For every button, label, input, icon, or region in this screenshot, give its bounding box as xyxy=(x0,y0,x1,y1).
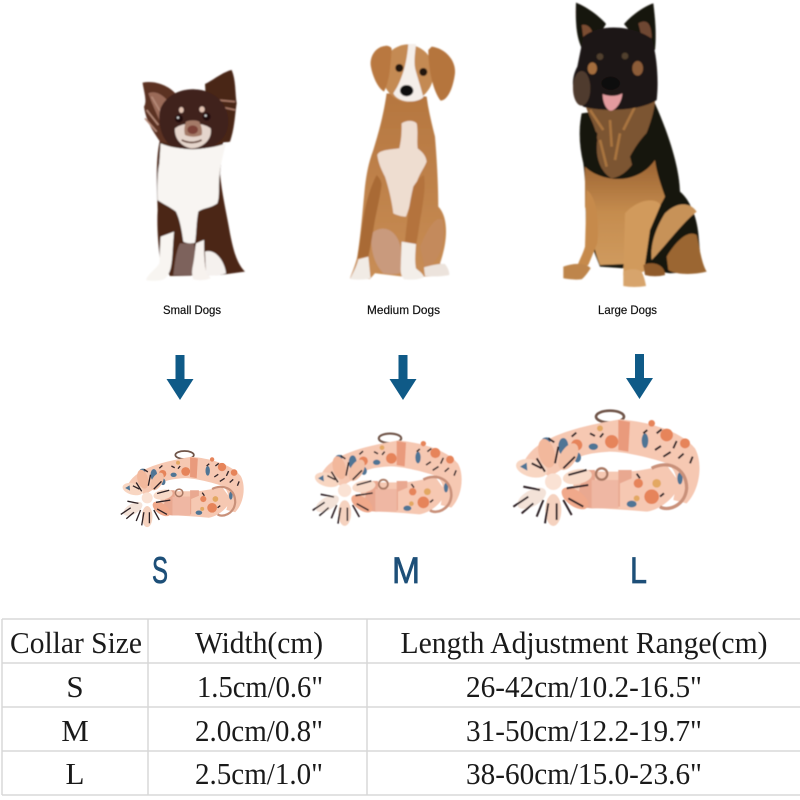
size table xyxy=(2,619,800,795)
collar: medium xyxy=(313,434,462,526)
size letter: L: L xyxy=(630,550,647,591)
arrow: large xyxy=(626,354,653,399)
table row: M: 2.0cm/0.8" xyxy=(195,713,323,748)
size letter: S: S xyxy=(152,550,168,591)
size letter: M: M xyxy=(392,550,420,591)
table row: L: 2.5cm/1.0" xyxy=(195,756,323,791)
table row: S: 26-42cm/10.2-16.5" xyxy=(466,669,702,704)
table header xyxy=(10,625,768,660)
table row: L xyxy=(66,756,702,791)
table row: M: 31-50cm/12.2-19.7" xyxy=(466,713,702,748)
panel: dog sizes xyxy=(143,3,707,317)
collar: large xyxy=(513,411,700,526)
table header: Collar Size xyxy=(10,625,142,660)
table row: L: L xyxy=(66,756,84,791)
arrow: medium xyxy=(390,355,416,400)
illustration: small dog xyxy=(143,70,245,281)
table row: S: 1.5cm/0.6" xyxy=(197,669,323,704)
label: small dogs: Small Dogs xyxy=(163,303,221,317)
table header: Width(cm) xyxy=(195,625,323,660)
table row: S: S xyxy=(66,669,84,704)
illustration: large dog xyxy=(563,3,707,287)
table row: S xyxy=(66,669,702,704)
table row: M xyxy=(61,713,702,748)
label: large dogs: Large Dogs xyxy=(598,303,657,317)
table row: M: M xyxy=(61,713,89,748)
label: medium dogs: Medium Dogs xyxy=(367,303,440,317)
arrow: small xyxy=(166,355,194,400)
collar: small xyxy=(121,451,244,527)
table header: Length Adjustment Range(cm) xyxy=(400,625,768,660)
table row: L: 38-60cm/15.0-23.6" xyxy=(466,756,702,791)
illustration: medium dog xyxy=(350,44,455,280)
